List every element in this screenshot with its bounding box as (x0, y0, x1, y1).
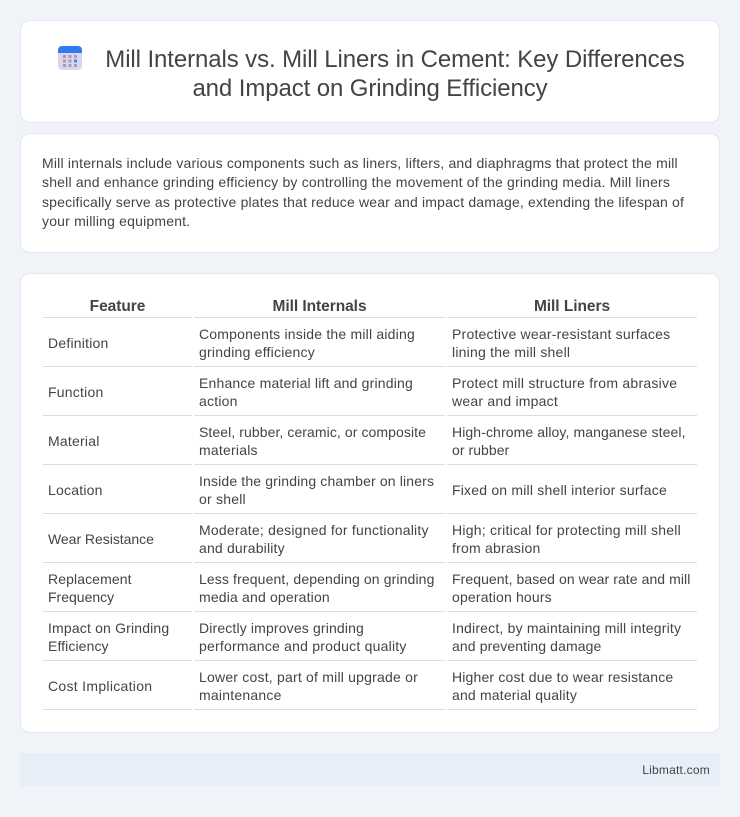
row: Replacement Frequency: Frequency (48, 589, 114, 605)
row: Definition: Protective wear-resistant surfaces (452, 326, 670, 342)
row: Impact on Grinding Efficiency (43, 620, 697, 661)
row: Cost Implication: and material quality (452, 687, 577, 703)
row: Wear Resistance: High; critical for protecting mill shell (452, 522, 681, 538)
title (105, 46, 685, 102)
panel: comparison table card (20, 273, 720, 733)
row: Location (43, 473, 697, 514)
table header: Feature (90, 298, 145, 315)
row: Wear Resistance: Moderate; designed for functionality (199, 522, 429, 538)
panel: intro card (20, 133, 720, 253)
row: Material: or rubber (452, 442, 509, 458)
row: Replacement Frequency (43, 571, 697, 612)
row: Material: Material (48, 433, 100, 449)
title: and Impact on Grinding Efficiency (192, 75, 548, 102)
row: Cost Implication (43, 669, 697, 710)
row: Definition: grinding efficiency (199, 344, 315, 360)
table header (43, 298, 697, 318)
row: Location: or shell (199, 491, 246, 507)
title: Mill Internals vs. Mill Liners in Cement: Key Differences (105, 46, 685, 73)
footer: Libmatt.com (642, 763, 710, 777)
row: Wear Resistance: Wear Resistance (48, 531, 154, 547)
table header: Mill Internals (272, 298, 367, 315)
row: Function: wear and impact (452, 393, 558, 409)
row: Material (43, 424, 697, 465)
icon: calendar (58, 46, 82, 70)
row: Impact on Grinding Efficiency: Impact on Grinding (48, 620, 169, 636)
row: Replacement Frequency: Frequent, based on wear rate and mill (452, 571, 690, 587)
panel: title card (20, 20, 720, 123)
footer (20, 753, 720, 786)
text block: intro paragraph: your milling equipment. (42, 213, 190, 229)
text block: intro paragraph (42, 155, 684, 229)
table header: Mill Liners (534, 298, 610, 315)
row: Cost Implication: maintenance (199, 687, 282, 703)
row: Wear Resistance: from abrasion (452, 540, 540, 556)
row: Definition: lining the mill shell (452, 344, 570, 360)
row: Location: Fixed on mill shell interior surface (452, 482, 667, 498)
row: Material: materials (199, 442, 258, 458)
row: Replacement Frequency: media and operation (199, 589, 330, 605)
row: Location: Inside the grinding chamber on liners (199, 473, 434, 489)
row: Definition (43, 326, 697, 367)
row: Function: Protect mill structure from abrasive (452, 375, 677, 391)
text block: intro paragraph: specifically serve as protective plates that reduce wear and impact damage, extending the lifespan of (42, 194, 684, 210)
row: Location: Location (48, 482, 103, 498)
row: Definition: Components inside the mill aiding (199, 326, 415, 342)
row: Cost Implication: Higher cost due to wear resistance (452, 669, 673, 685)
row: Function: Function (48, 384, 103, 400)
row: Cost Implication: Lower cost, part of mill upgrade or (199, 669, 418, 685)
row: Wear Resistance: and durability (199, 540, 285, 556)
row: Impact on Grinding Efficiency: performance and product quality (199, 638, 407, 654)
row: Material: High-chrome alloy, manganese steel, (452, 424, 686, 440)
row: Replacement Frequency: Replacement (48, 571, 132, 587)
row: Impact on Grinding Efficiency: and preventing damage (452, 638, 601, 654)
row: Replacement Frequency: Less frequent, depending on grinding (199, 571, 434, 587)
row: Function: action (199, 393, 238, 409)
text block: intro paragraph: Mill internals include various components such as liners, lifters, and diaphragms that protect the mill (42, 155, 678, 171)
row: Wear Resistance (43, 522, 697, 563)
row: Definition: Definition (48, 335, 109, 351)
row: Replacement Frequency: operation hours (452, 589, 552, 605)
row: Function: Enhance material lift and grinding (199, 375, 413, 391)
row: Function (43, 375, 697, 416)
row: Material: Steel, rubber, ceramic, or composite (199, 424, 426, 440)
text block: intro paragraph: shell and enhance grinding efficiency by controlling the movement of the grinding media. Mill liners (42, 174, 670, 190)
row: Impact on Grinding Efficiency: Directly improves grinding (199, 620, 364, 636)
row: Impact on Grinding Efficiency: Indirect, by maintaining mill integrity (452, 620, 681, 636)
row: Cost Implication: Cost Implication (48, 678, 152, 694)
row: Impact on Grinding Efficiency: Efficiency (48, 638, 109, 654)
